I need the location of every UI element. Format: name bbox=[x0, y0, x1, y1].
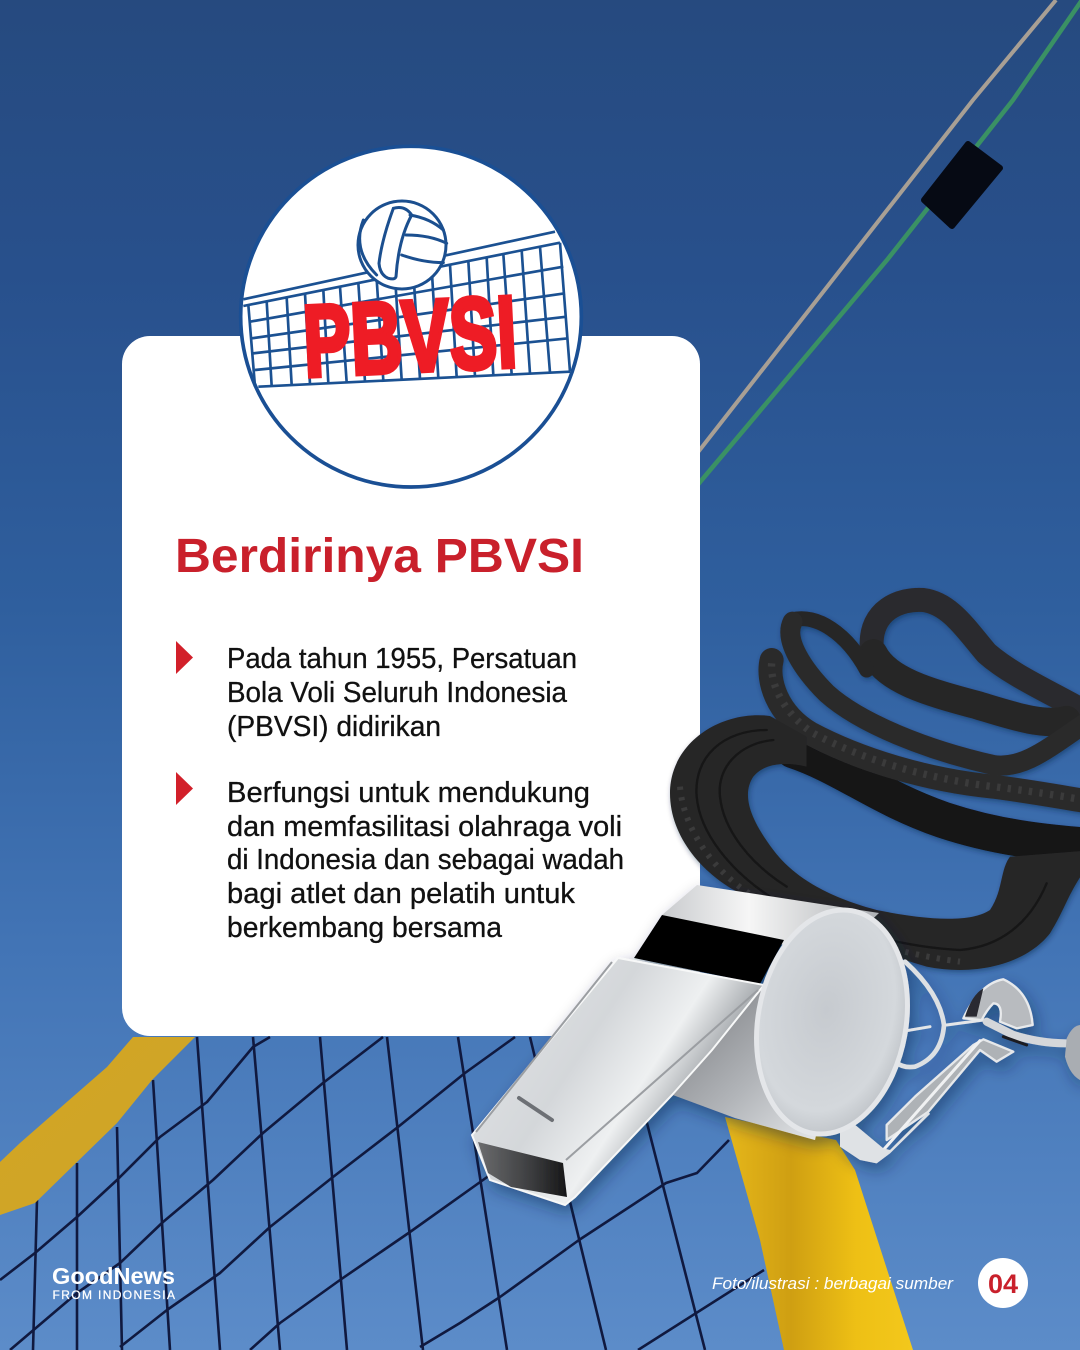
bullet marker 1 bbox=[176, 641, 193, 674]
whistle: top band bbox=[662, 885, 879, 945]
text block: bullet 2: dan memfasilitasi olahraga voli bbox=[227, 811, 622, 843]
whistle: side disc bbox=[740, 898, 924, 1146]
text block: bullet 2: bagi atlet dan pelatih untuk bbox=[227, 878, 576, 910]
photo: whistle cord bbox=[670, 600, 1080, 970]
brand logo: GoodNews from Indonesia bbox=[52, 1263, 175, 1302]
background: yellow pole bbox=[725, 1117, 913, 1350]
text block: bullet 2: Berfungsi untuk mendukung bbox=[227, 777, 590, 809]
panel: white card bbox=[122, 336, 700, 1036]
text block: bullet 1: (PBVSI) didirikan bbox=[227, 711, 441, 743]
background: yellow net band bbox=[0, 1037, 195, 1215]
bullet marker 2 bbox=[176, 772, 193, 805]
page number badge: 04 bbox=[988, 1269, 1018, 1299]
logo: volleyball bbox=[358, 201, 447, 289]
whistle: mouth opening bbox=[478, 1142, 567, 1197]
heading: Berdirinya PBVSI bbox=[175, 530, 584, 583]
photo: metal whistle bbox=[472, 885, 1080, 1205]
text block: bullet 2: di Indonesia dan sebagai wadah bbox=[227, 844, 624, 876]
background: volleyball net bbox=[0, 1037, 764, 1350]
logo: PBVSI wordmark: PBVSI bbox=[301, 275, 519, 398]
page number badge bbox=[978, 1258, 1028, 1308]
whistle: clip and rings bbox=[840, 962, 1080, 1163]
text block: bullet 1: Pada tahun 1955, Persatuan bbox=[227, 643, 577, 675]
whistle: mouthpiece bbox=[472, 958, 764, 1205]
whistle: vent mark bbox=[519, 1098, 552, 1120]
brand logo: GoodNews from Indonesia: FROM INDONESIA bbox=[52, 1288, 175, 1302]
whistle: black slot bbox=[634, 915, 784, 984]
whistle: lower body bbox=[673, 985, 840, 1140]
text block: bullet 1: Bola Voli Seluruh Indonesia bbox=[227, 677, 567, 709]
whistle: edge highlight bbox=[476, 962, 758, 1160]
brand logo: GoodNews from Indonesia: GoodNews bbox=[52, 1263, 175, 1289]
background: wires and net clip bbox=[695, 0, 1080, 488]
credit text: Foto/ilustrasi : berbagai sumber bbox=[712, 1274, 954, 1293]
text block: bullet 2 bbox=[227, 777, 624, 944]
text block: bullet 2: berkembang bersama bbox=[227, 912, 502, 944]
text block: bullet 1 bbox=[227, 643, 577, 743]
logo: PBVSI emblem bbox=[241, 146, 581, 487]
